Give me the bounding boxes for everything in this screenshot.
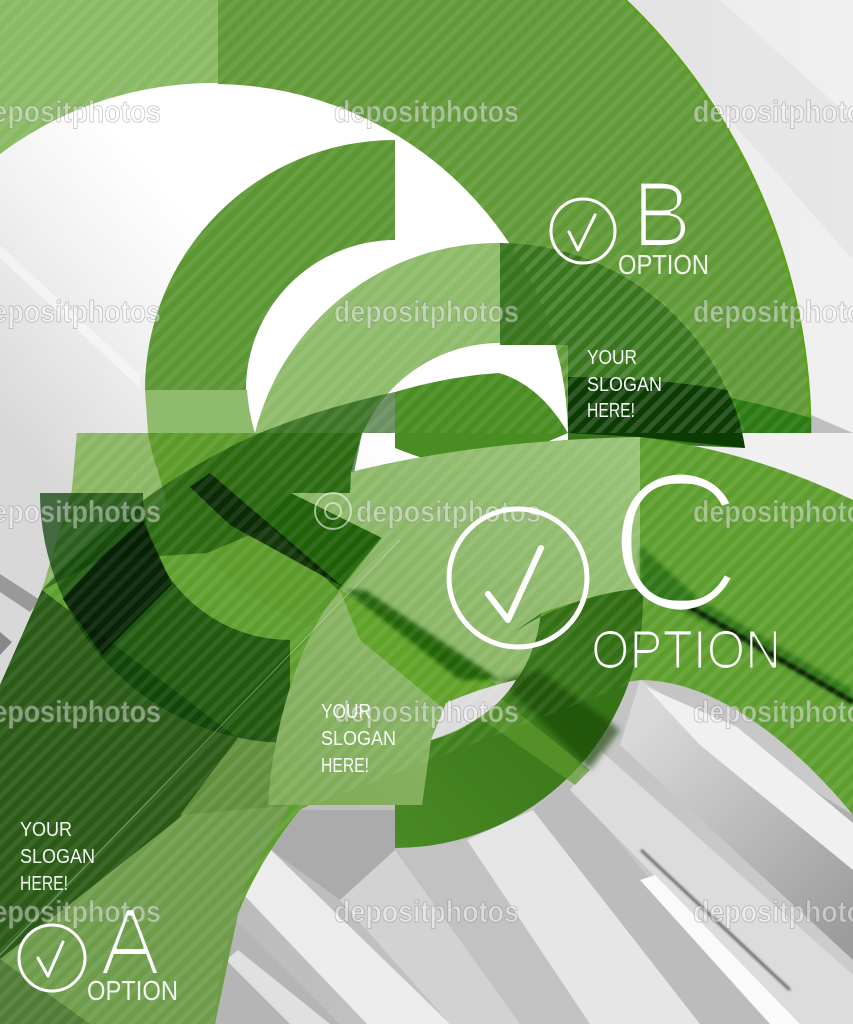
option B — [551, 164, 709, 280]
option B: OPTION — [618, 249, 709, 280]
black band overlap — [568, 377, 745, 448]
panel: big green ring B — [218, 0, 810, 433]
mid ring right quarter — [500, 243, 745, 448]
dark lower-left lens — [0, 590, 240, 959]
green block under arc — [395, 373, 568, 473]
ring B bright edge — [625, 0, 810, 433]
slogan centre: YOUR — [321, 701, 371, 723]
option A: OPTION — [87, 975, 178, 1006]
dark streak in ring — [500, 670, 620, 770]
darker corner lower-left — [0, 959, 90, 1024]
icon: watermark camera — [315, 493, 351, 529]
mid ring left quarter — [255, 243, 500, 470]
option B: B — [632, 164, 692, 266]
watermarks: depositphotos — [334, 94, 519, 129]
slogan centre: HERE! — [321, 755, 369, 777]
slogan top right: YOUR — [587, 347, 637, 369]
slogan centre: SLOGAN — [321, 728, 396, 750]
white crescent — [451, 345, 566, 425]
diagonal streak dark — [345, 590, 500, 680]
option A: A — [100, 889, 160, 994]
option C: OPTION — [591, 620, 781, 680]
diagonal streak bright — [340, 590, 520, 730]
watermarks: depositphotos — [334, 894, 519, 929]
watermarks: depositphotos — [356, 494, 541, 529]
dark overlay below arc — [42, 392, 395, 590]
dark quarter ring left — [40, 493, 290, 743]
light strip under upper ring — [145, 390, 255, 433]
background streaks top right — [625, 0, 853, 503]
dark green quarter ring upper — [145, 140, 395, 390]
bright streak in ring — [455, 690, 590, 785]
left grey streaks — [0, 245, 140, 655]
black diagonal band — [190, 473, 343, 587]
right band — [568, 377, 811, 433]
white circle — [0, 83, 568, 793]
option C — [449, 431, 781, 680]
lighter diagonal band lower-left — [0, 805, 290, 1024]
dark ring quarter bottom — [395, 588, 643, 848]
olive band — [180, 735, 295, 815]
slogan centre — [321, 701, 396, 777]
grey diagonal stripes — [215, 680, 853, 1024]
dark wedge tip — [260, 493, 382, 590]
slogan top right — [587, 347, 662, 422]
inner grey lens — [431, 680, 516, 740]
panel: top-left green block — [0, 0, 218, 156]
right black streak — [690, 607, 853, 702]
option C: C — [608, 431, 744, 654]
grey lower region — [215, 680, 853, 1024]
slogan bottom left: SLOGAN — [20, 846, 95, 868]
black diamond — [63, 521, 172, 655]
panel: light sector slogan — [268, 437, 640, 805]
slogan bottom left — [20, 819, 95, 895]
white inner patch — [246, 240, 568, 433]
panel: big green sweep — [0, 433, 853, 1024]
watermarks: depositphotos — [334, 694, 519, 729]
slogan bottom left: HERE! — [20, 873, 68, 895]
thin diagonal light line — [0, 540, 400, 955]
option A — [19, 889, 178, 1006]
slogan top right: HERE! — [587, 400, 635, 422]
lower quarter ring — [148, 433, 395, 640]
watermarks: depositphotos — [334, 294, 519, 329]
light left patch — [42, 433, 167, 590]
right green streak — [640, 545, 853, 705]
slogan top right: SLOGAN — [587, 374, 662, 396]
slogan bottom left: YOUR — [20, 819, 72, 841]
